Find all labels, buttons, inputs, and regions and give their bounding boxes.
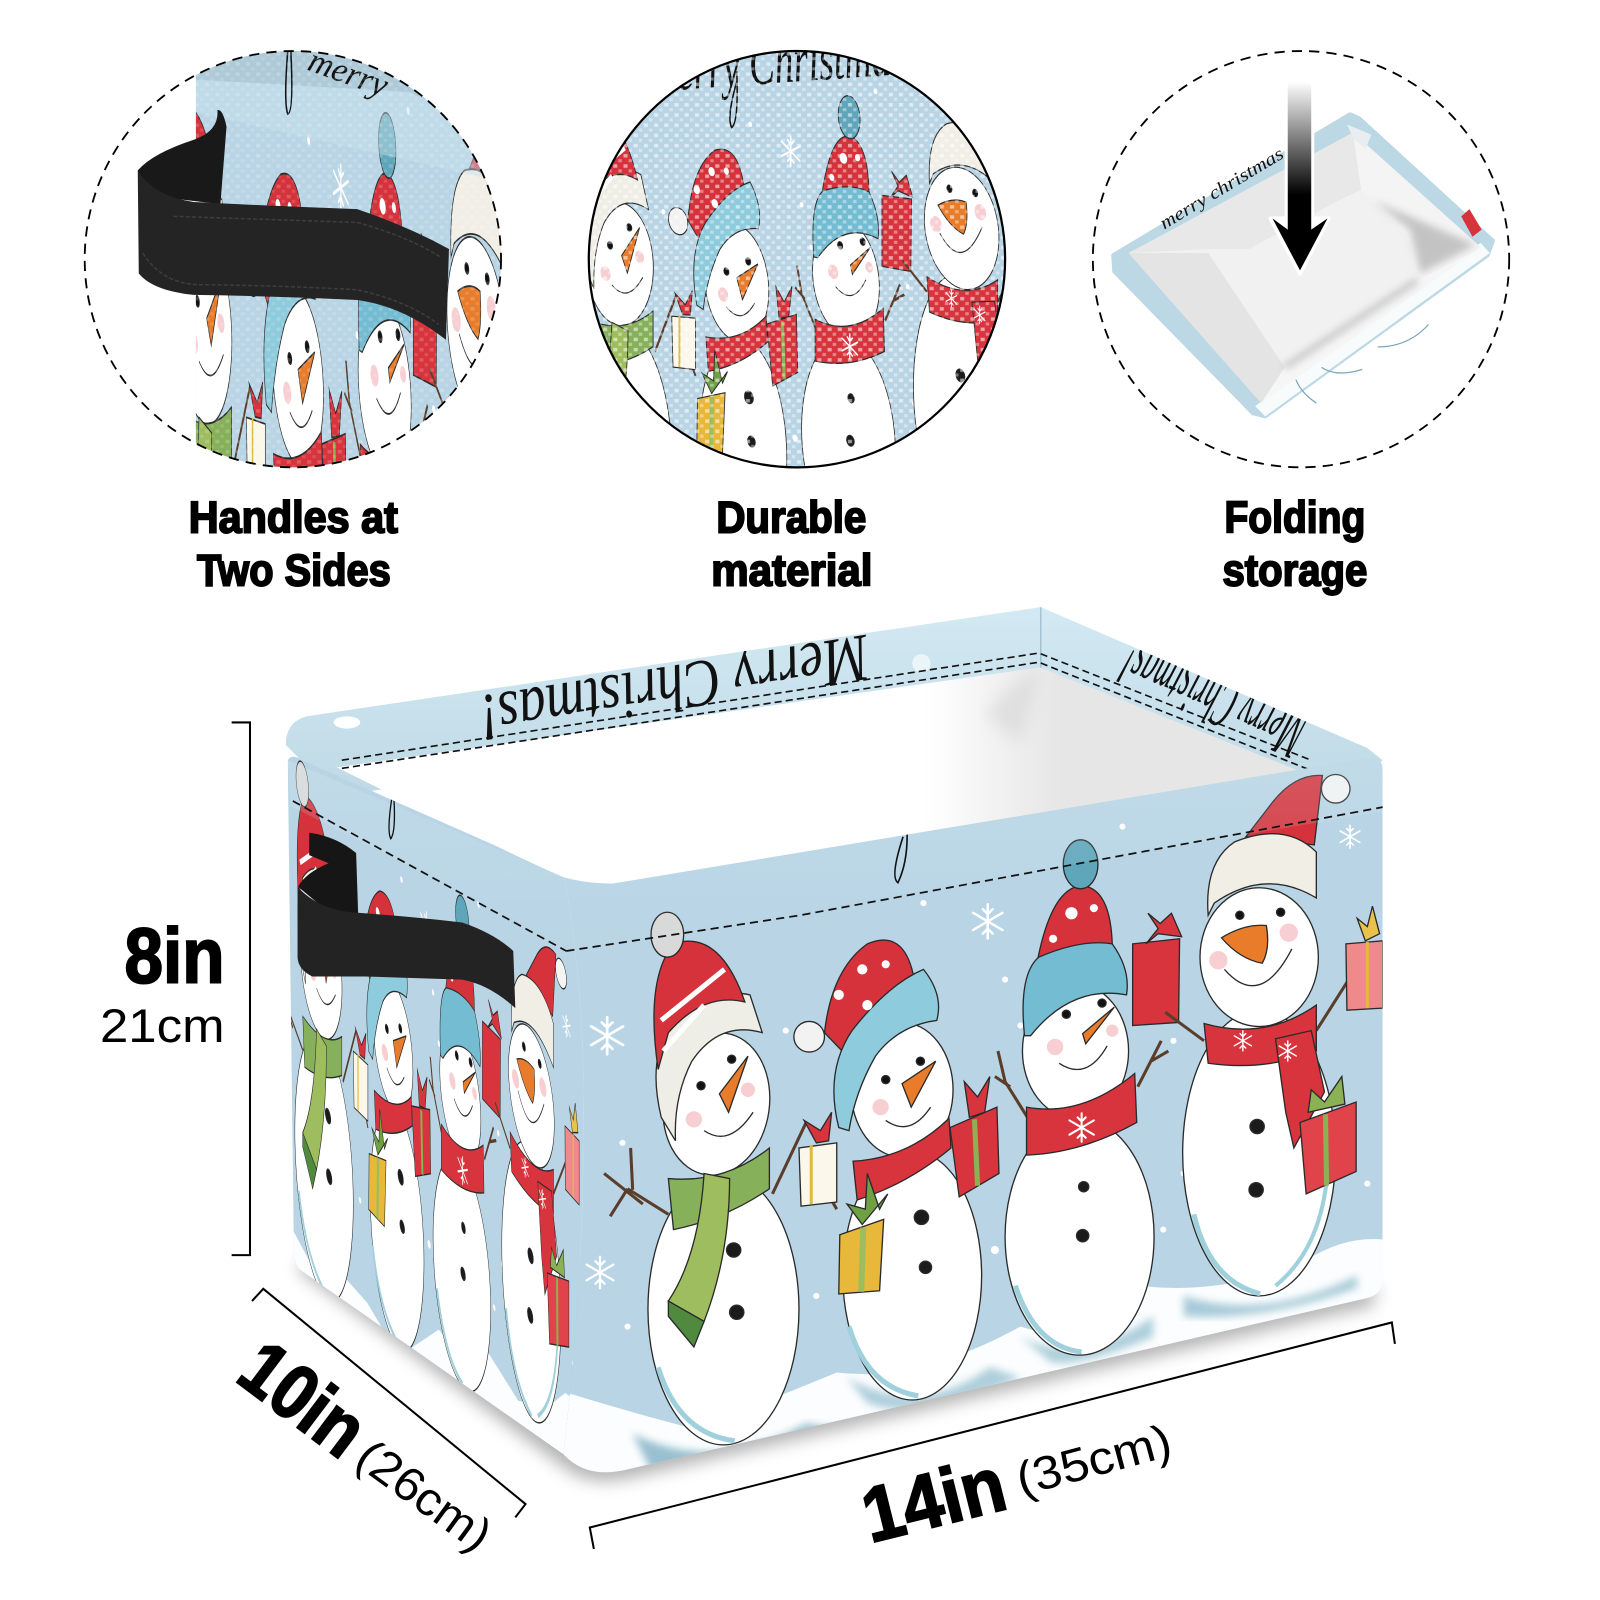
heading: Durable material [711,492,872,596]
dimension: width 14in: (35cm) [1011,1414,1177,1506]
side panel print [288,756,584,1454]
inner back walls [286,607,1382,791]
white interior lining [337,667,1316,890]
dimension: depth 10in: (26cm) [347,1429,502,1561]
detail circle: durable material [588,50,1006,468]
arrow: fold down [1270,82,1329,273]
dimension: width 14in: 14in [854,1441,1014,1559]
dimension: width 14in [590,1322,1395,1559]
basket ground shadow [298,1257,1378,1481]
dimension: height 8in [100,722,250,1255]
heading: Durable material: material [711,545,872,596]
heading: Handles at Two Sides: Two Sides [197,545,391,596]
dimension: depth 10in [223,1289,526,1561]
heading: Folding storage [1222,492,1367,596]
heading: Folding storage: Folding [1224,492,1365,543]
heading: Durable material: Durable [716,492,866,543]
icon: main strap handle [298,833,515,1008]
zoomed fabric print [590,52,1004,466]
solid circle outline [589,51,1005,467]
dimension: height 8in: 8in [124,914,224,1000]
heading: Handles at Two Sides [189,492,398,596]
inverted print text back wall: Merry Christmas! [475,620,876,756]
side stitch line [293,801,566,951]
main basket [271,510,1388,1504]
rim band [650,768,1351,936]
small print text: merry christmas [1156,143,1287,233]
dashed circle outline [1093,51,1509,467]
detail circle: folding storage [1093,51,1509,467]
heading: Folding storage: storage [1222,545,1367,596]
zoomed basket side print: merry [303,40,394,105]
detail circle: handles [84,50,502,468]
print background [510,510,1388,1490]
snow ground [551,1239,1386,1490]
snowman: santa hat [1165,774,1383,1296]
heading: Handles at Two Sides: Handles at [189,492,398,543]
dashed circle outline [85,51,501,467]
dimension: depth 10in: 10in [223,1324,383,1474]
snowman: teal hat [794,940,999,1400]
zoomed fabric print: erry Christmas [674,18,908,104]
front panel print [563,762,1383,1472]
folded basket [1113,114,1493,416]
lining stitches [342,653,1311,770]
inner back walls: Merry Christmas! [1108,620,1319,775]
icon: black strap handle [138,110,449,340]
snowflakes [587,823,1370,1330]
dimension: height 8in: 21cm [100,1000,224,1052]
print letter descender [894,834,908,884]
zoomed basket side print [196,51,501,468]
front stitch line [566,807,1383,951]
snowman: blue beanie [995,840,1182,1355]
snowman: green scarf [604,912,806,1445]
